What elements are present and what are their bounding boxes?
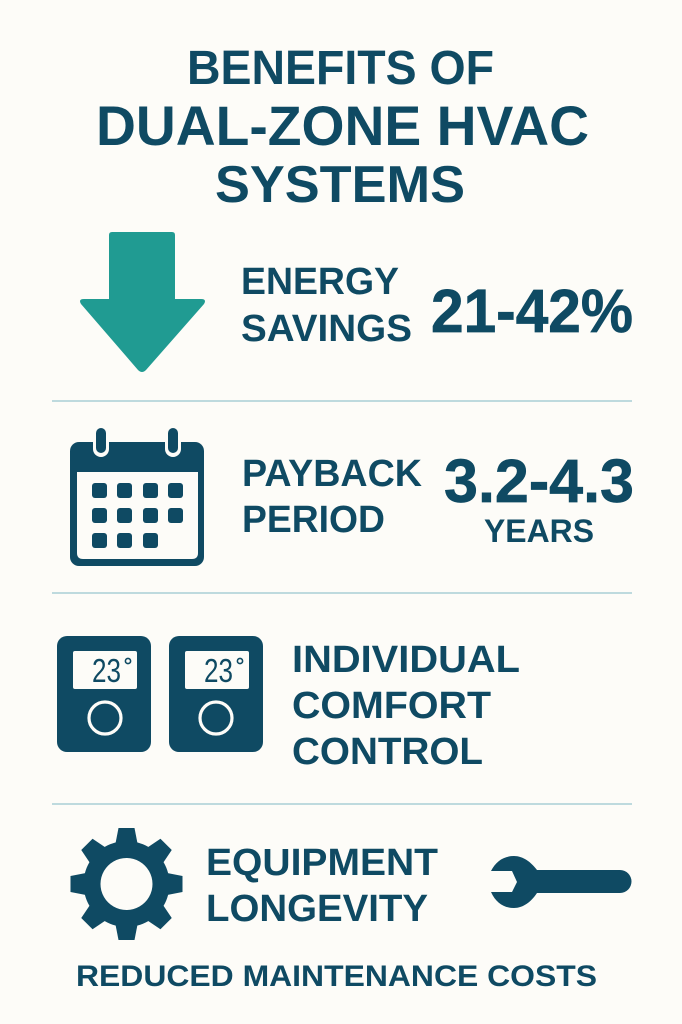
energy savings label: ENERGY (241, 261, 399, 303)
title: BENEFITS OF (187, 42, 494, 95)
title: SYSTEMS (215, 156, 465, 214)
icon: gear (70, 828, 182, 940)
panel: equipment longevity (70, 828, 632, 940)
energy savings label (241, 261, 412, 350)
footer: reduced maintenance costs: REDUCED MAINTENANCE COSTS (76, 960, 597, 993)
equipment longevity label: LONGEVITY (206, 888, 428, 930)
energy savings value: 21-42% (431, 277, 633, 345)
payback value (444, 447, 634, 549)
icon: thermostat left (57, 636, 151, 752)
icon: down arrow (80, 232, 205, 372)
panel: individual comfort control (57, 636, 520, 773)
equipment longevity label (206, 842, 438, 930)
title (96, 42, 589, 214)
individual comfort control label: INDIVIDUAL (292, 639, 520, 681)
icon: calendar (70, 426, 204, 566)
individual comfort control label: COMFORT (292, 685, 491, 727)
equipment longevity label: EQUIPMENT (206, 842, 438, 884)
payback period label: PERIOD (242, 499, 385, 541)
title: DUAL-ZONE HVAC (96, 94, 589, 157)
panel: payback period (70, 426, 634, 566)
individual comfort control label (292, 639, 520, 773)
payback period label (242, 453, 423, 541)
icon: thermostat right: 23 (204, 652, 233, 689)
energy savings label: SAVINGS (241, 308, 412, 350)
payback value: 3.2-4.3 (444, 447, 634, 515)
panel: energy savings (80, 232, 633, 372)
icon: thermostat left: 23 (92, 652, 121, 689)
icon: wrench (491, 856, 632, 908)
icon: thermostat right (169, 636, 263, 752)
payback value: YEARS (484, 513, 594, 549)
payback period label: PAYBACK (242, 453, 423, 495)
individual comfort control label: CONTROL (292, 731, 483, 773)
